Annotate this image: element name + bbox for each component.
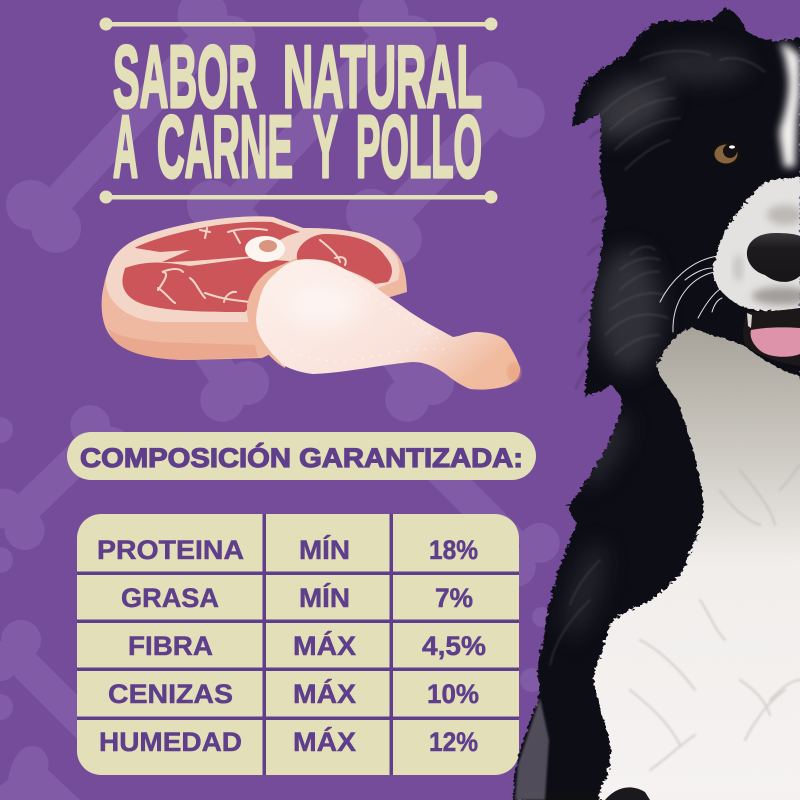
dog: whiskers — [660, 256, 722, 332]
dog: tooth — [747, 313, 752, 328]
heading text: COMPOSICIÓN GARANTIZADA: — [80, 442, 523, 473]
title line 2: Y — [313, 97, 338, 196]
row: fibra: FIBRA — [128, 631, 213, 661]
row: fibra: MÁX — [293, 630, 356, 661]
row: cenizas: CENIZAS — [108, 679, 233, 709]
illustration: steak and chicken drumstick — [102, 216, 521, 390]
row: grasa — [121, 582, 473, 613]
title line 2: CARNE — [157, 97, 293, 196]
dog: black coat — [513, 9, 800, 800]
dog illustration — [513, 9, 800, 800]
dog: nose — [747, 233, 800, 282]
dog: mouth — [743, 308, 800, 366]
dog: bottom edge fill — [525, 792, 605, 800]
drumstick skin dots — [285, 280, 450, 361]
row: fibra: 4,5% — [422, 631, 486, 661]
dog: grey foreleg shade — [515, 698, 549, 800]
dog: grey sheen on coat — [554, 47, 750, 642]
row: grasa: 7% — [435, 583, 473, 613]
dog: muzzle and cheek — [713, 177, 800, 311]
row: humedad: 12% — [429, 727, 478, 757]
steak bone — [245, 236, 285, 262]
row: grasa: MÍN — [299, 582, 350, 613]
bottom-left bone stub — [0, 746, 80, 800]
dog: paw spot — [605, 787, 650, 800]
background bone pattern — [0, 0, 568, 800]
dog: ear and ruff fur strokes — [550, 51, 765, 665]
row: proteina — [97, 534, 478, 565]
dog: chest white fur — [593, 327, 800, 800]
row: grasa: GRASA — [121, 583, 219, 613]
row: cenizas: MÁX — [293, 678, 356, 709]
dog: tongue — [751, 327, 800, 357]
title block — [100, 18, 498, 204]
dog: forehead blaze — [779, 43, 800, 167]
dog: stray hair strands — [576, 130, 606, 388]
title line 1: SABOR — [113, 27, 257, 126]
infographic canvas: POLLO — [356, 97, 482, 196]
row: humedad — [99, 726, 478, 757]
heading pill — [67, 432, 536, 480]
row: cenizas: 10% — [427, 679, 479, 709]
composition table — [77, 514, 519, 775]
marbling — [158, 228, 346, 303]
row: proteina: 18% — [429, 535, 478, 565]
row: humedad: HUMEDAD — [99, 727, 242, 757]
dog: eye — [713, 141, 741, 165]
title block: NATURAL — [283, 27, 482, 126]
top divider — [100, 18, 498, 30]
row: fibra — [128, 630, 486, 661]
row: cenizas — [108, 678, 479, 709]
row: proteina: PROTEINA — [97, 535, 244, 565]
dog: muzzle shading — [734, 205, 800, 305]
dog: chest fur detail — [630, 465, 800, 770]
drumstick — [247, 258, 521, 390]
row: proteina: MÍN — [299, 534, 350, 565]
bottom divider — [100, 190, 498, 204]
steak — [102, 216, 407, 360]
row: humedad: MÁX — [293, 726, 356, 757]
title line 2: A — [113, 97, 138, 196]
dog: chest edge fill — [602, 382, 800, 800]
